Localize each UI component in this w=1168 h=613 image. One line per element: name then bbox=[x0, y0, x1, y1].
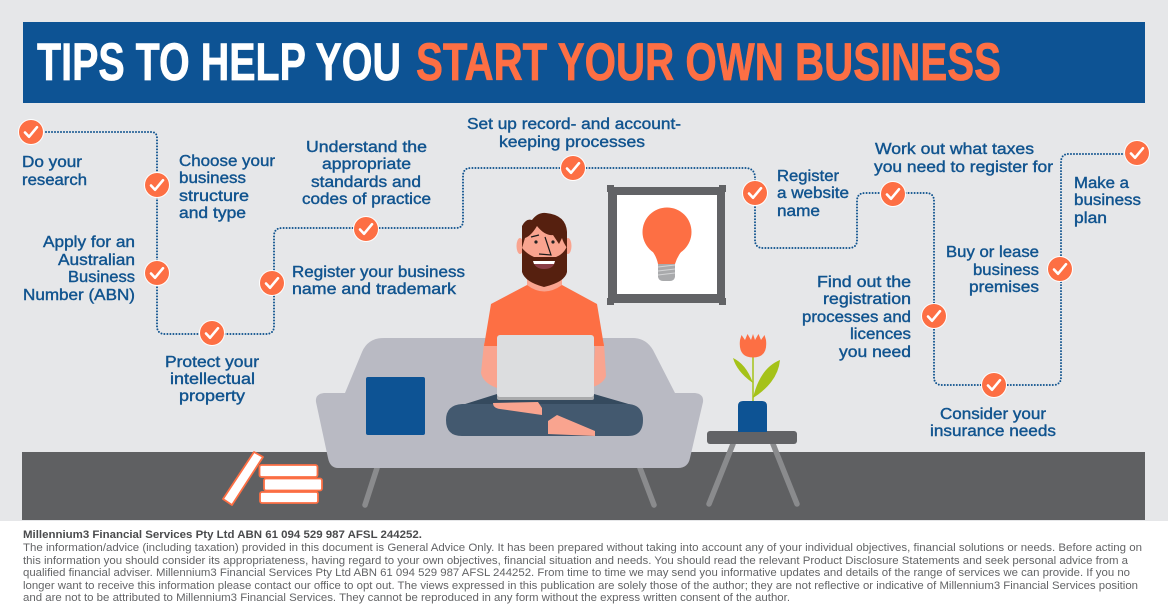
step: apply for ABN: Business bbox=[68, 269, 135, 286]
step: business plan: plan bbox=[1074, 210, 1107, 227]
hair bbox=[522, 213, 567, 248]
step: business plan bbox=[1074, 140, 1150, 227]
step: choose structure: Choose your bbox=[179, 153, 275, 170]
step: premises bbox=[946, 244, 1073, 296]
step: protect IP: property bbox=[179, 388, 245, 405]
title banner bbox=[23, 22, 1145, 103]
stack of books bbox=[223, 452, 322, 505]
cushion bbox=[366, 377, 425, 435]
step: website: name bbox=[777, 203, 820, 220]
step: record keeping: Set up record- and account- bbox=[467, 116, 681, 133]
step: choose structure: and type bbox=[179, 205, 246, 222]
t-shirt bbox=[484, 285, 604, 346]
step: registration: Find out the bbox=[817, 274, 911, 291]
step: premises: Buy or lease bbox=[946, 244, 1039, 261]
side table with flower bbox=[707, 334, 797, 504]
man with laptop bbox=[446, 213, 643, 436]
title: orange part: START YOUR OWN BUSINESS bbox=[416, 33, 1001, 92]
step: apply for ABN bbox=[23, 234, 170, 304]
disclaimer: qualified financial adviser. Millennium3 Financial Services Pty Ltd ABN 61 094 529 987 AFSL 244252. From time to time we may send you informative updates and details of the range of services we can provide. If you no bbox=[23, 567, 1130, 579]
step: taxes: you need to register for bbox=[874, 159, 1053, 176]
face details bbox=[534, 240, 538, 244]
step: standards: Understand the bbox=[306, 139, 427, 156]
step: registration: licences bbox=[850, 326, 911, 343]
step: premises: premises bbox=[969, 279, 1039, 296]
disclaimer: The information/advice (including taxation) provided in this document is General Advice Only. It has been prepared without taking into account any of your individual objectives, financial solutions or needs. Before acting on bbox=[23, 542, 1142, 554]
feet bbox=[493, 402, 595, 436]
step: protect IP: Protect your bbox=[165, 354, 259, 371]
step: choose structure bbox=[144, 153, 275, 222]
disclaimer: this information you should consider its appropriateness, having regard to your own objectives, financial situation and needs. You should read the relevant Product Disclosure Statements and seek personal advice from a bbox=[23, 555, 1129, 567]
step: website: a website bbox=[777, 185, 849, 202]
stem and leaves bbox=[752, 355, 754, 401]
step: registration bbox=[802, 274, 947, 361]
step: protect IP: intellectual bbox=[170, 371, 255, 388]
title: white part: TIPS TO HELP YOU bbox=[37, 33, 401, 92]
step: insurance: insurance needs bbox=[930, 423, 1056, 440]
vase bbox=[738, 401, 767, 432]
step: premises: business bbox=[973, 262, 1039, 279]
step: standards: codes of practice bbox=[302, 191, 431, 208]
step: business plan: Make a bbox=[1074, 175, 1129, 192]
step: choose structure: structure bbox=[179, 188, 249, 205]
step: standards bbox=[302, 139, 431, 242]
step: record keeping: keeping processes bbox=[499, 134, 645, 151]
step: do your research: research bbox=[22, 172, 87, 189]
step: choose structure: business bbox=[179, 170, 246, 187]
step: taxes: Work out what taxes bbox=[875, 141, 1034, 158]
floor bbox=[22, 452, 1145, 520]
step: registration: processes and bbox=[802, 309, 911, 326]
step: apply for ABN: Australian bbox=[58, 252, 135, 269]
step: registration: registration bbox=[823, 291, 911, 308]
sofa bbox=[316, 338, 703, 505]
step: taxes bbox=[874, 141, 1053, 207]
laptop bbox=[497, 392, 594, 400]
step: registration: you need bbox=[839, 344, 911, 361]
dotted route line bbox=[31, 132, 1137, 385]
neck bbox=[527, 270, 562, 292]
step: record keeping bbox=[467, 116, 681, 181]
disclaimer: and are not to be attributed to Millennium3 Financial Services. They cannot be reproduced in any form without the express written consent of the author. bbox=[23, 592, 790, 604]
step: protect IP bbox=[165, 320, 259, 405]
step: do your research: Do your bbox=[22, 154, 82, 171]
disclaimer bbox=[23, 529, 1142, 604]
step: apply for ABN: Apply for an bbox=[43, 234, 135, 251]
step: standards: appropriate bbox=[322, 156, 411, 173]
head bbox=[516, 238, 524, 254]
step: standards: standards and bbox=[311, 174, 421, 191]
step: apply for ABN: Number (ABN) bbox=[23, 287, 135, 304]
step: do your research bbox=[18, 119, 87, 189]
disclaimer: longer want to receive this information please contact our office to opt out. The views expressed in this publication are solely those of the author; they are not reflective or indicative of Millennium3 Financial Services position bbox=[23, 580, 1138, 592]
step: register name: Register your business bbox=[292, 264, 465, 281]
beard bbox=[522, 246, 567, 287]
disclaimer: Millennium3 Financial Services Pty Ltd ABN 61 094 529 987 AFSL 244252. bbox=[23, 529, 422, 541]
step: insurance bbox=[930, 372, 1056, 440]
step: website bbox=[742, 168, 849, 220]
step: business plan: business bbox=[1074, 192, 1141, 209]
tulip bbox=[740, 334, 766, 358]
step: register name: name and trademark bbox=[292, 281, 456, 298]
arms bbox=[481, 343, 606, 388]
step: register name bbox=[259, 264, 465, 298]
legs bbox=[462, 394, 632, 405]
framed light bulb picture bbox=[607, 185, 726, 305]
step: insurance: Consider your bbox=[940, 406, 1046, 423]
step: website: Register bbox=[777, 168, 839, 185]
